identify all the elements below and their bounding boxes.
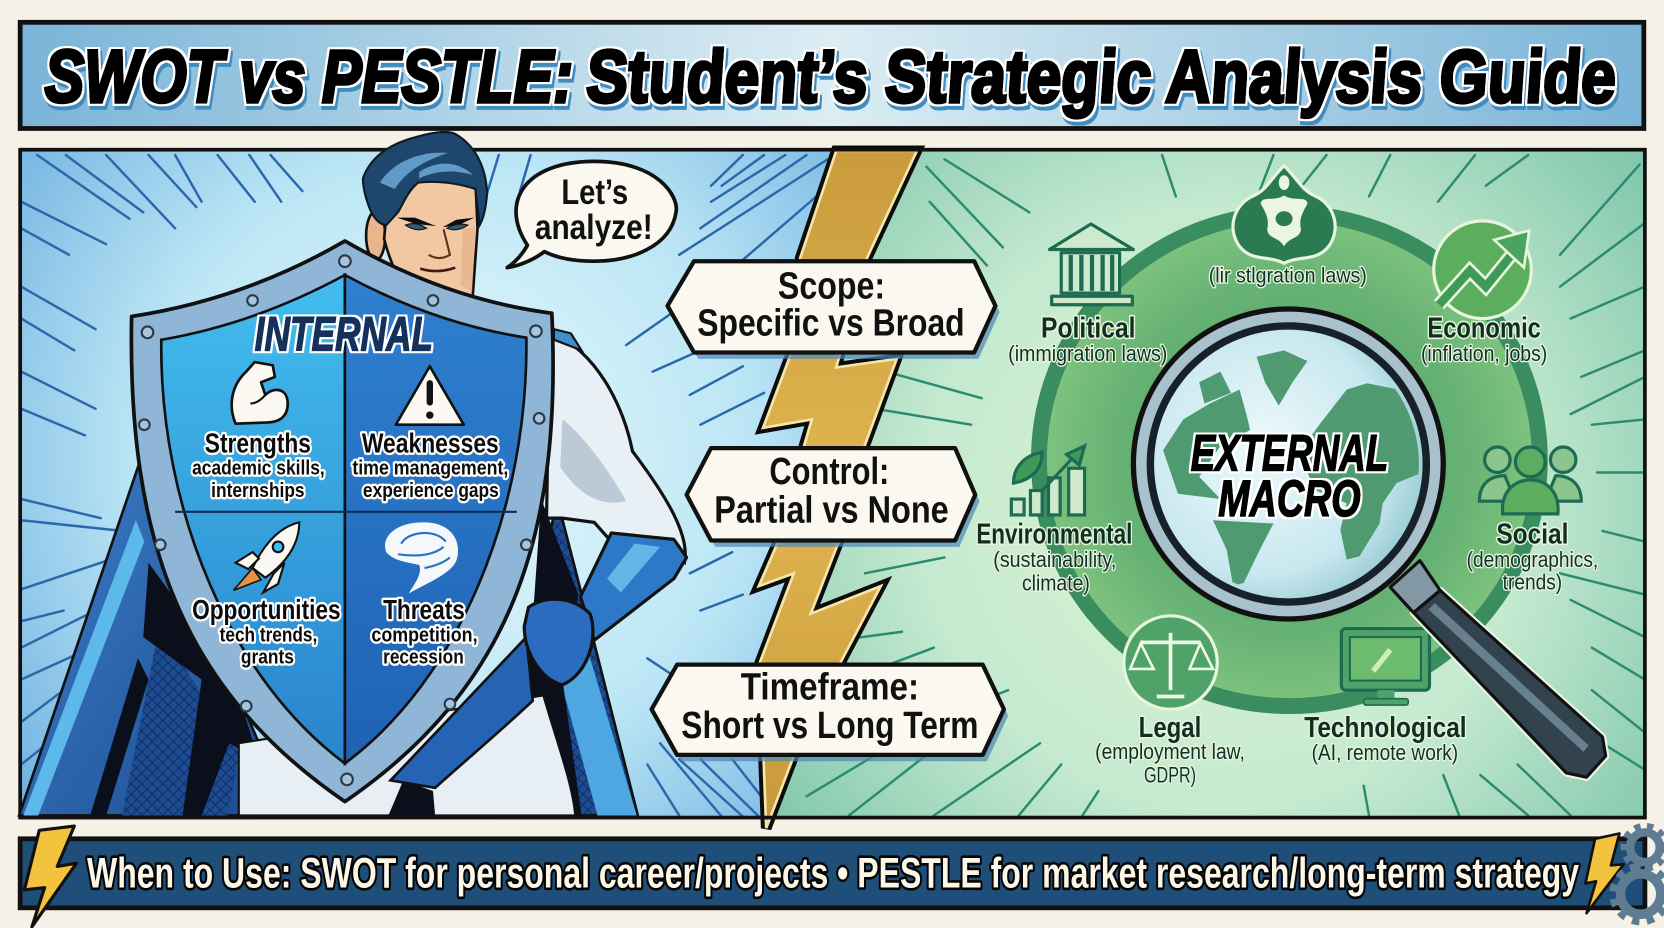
shield face right bbox=[345, 275, 526, 763]
gauntlet bbox=[580, 533, 687, 640]
pestle: environmental bbox=[976, 446, 1132, 595]
pestle: legal: GDPR) bbox=[1144, 763, 1196, 788]
quadrant: threats: Threats bbox=[383, 594, 465, 625]
superhero figure bbox=[19, 132, 687, 815]
pestle: social: Social bbox=[1496, 519, 1568, 551]
magnifying glass with globe bbox=[1133, 309, 1606, 777]
hair highlights bbox=[380, 153, 473, 189]
divider lightning bolt bbox=[759, 151, 917, 828]
pestle: social: trends) bbox=[1503, 569, 1562, 594]
quadrant: opportunities: Opportunities bbox=[192, 594, 341, 625]
brows bbox=[397, 218, 474, 227]
pestle: political bbox=[1008, 224, 1167, 366]
icon: scales of justice bbox=[1124, 616, 1217, 709]
comparison: control: Control: bbox=[769, 450, 889, 493]
icon: growth arrow bbox=[1434, 221, 1531, 319]
quadrant: opportunities: grants bbox=[241, 647, 294, 669]
comparison: timeframe bbox=[652, 665, 1008, 761]
quadrant: threats: competition, bbox=[371, 624, 478, 646]
icon: government building bbox=[1050, 224, 1133, 305]
gap between legs bbox=[388, 780, 435, 815]
quadrant dividers bbox=[175, 511, 517, 513]
icon: tornado bbox=[385, 522, 458, 594]
title: SWOT vs PESTLE: bbox=[45, 35, 573, 118]
quadrant: strengths: internships bbox=[211, 480, 305, 502]
cape right bbox=[499, 499, 638, 815]
pestle: economic: (inflation, jobs) bbox=[1421, 341, 1547, 366]
icon: gears bbox=[1613, 826, 1664, 922]
panel frame bbox=[20, 150, 1645, 818]
lens label: MACRO bbox=[1218, 470, 1360, 527]
shoulder and arm bbox=[547, 331, 685, 563]
speech bubble bbox=[507, 161, 676, 268]
quadrant: threats: recession bbox=[383, 647, 464, 669]
ring and disc behind PESTLE factors bbox=[1039, 213, 1540, 706]
icon: rocket bbox=[233, 522, 299, 592]
nose bbox=[429, 229, 450, 258]
hair bbox=[363, 132, 487, 225]
quadrant: weaknesses bbox=[352, 427, 508, 502]
quadrant: threats bbox=[371, 594, 478, 669]
icon: left lightning bbox=[24, 826, 76, 927]
comparison: timeframe: Timeframe: bbox=[741, 666, 919, 709]
title bbox=[45, 35, 1619, 118]
fist bbox=[524, 599, 593, 685]
shield face left bbox=[161, 275, 345, 763]
shield heading: INTERNAL bbox=[255, 308, 433, 361]
pestle: social: (demographics, bbox=[1467, 547, 1598, 572]
pestle: environmental: (sustainability, bbox=[993, 547, 1116, 572]
comparison: control: Partial vs None bbox=[714, 488, 949, 531]
lens rim bbox=[1133, 309, 1443, 619]
quadrant: weaknesses: time management, bbox=[352, 458, 508, 480]
title banner bbox=[20, 22, 1644, 128]
handle bbox=[1390, 561, 1606, 777]
bottom banner bbox=[20, 839, 1645, 908]
quadrant: weaknesses: experience gaps bbox=[363, 480, 499, 502]
pestle: political: (immigration laws) bbox=[1008, 341, 1167, 366]
pestle: legal: Legal bbox=[1139, 712, 1201, 744]
speech bubble: analyze! bbox=[535, 208, 653, 247]
globe continents bbox=[1163, 350, 1427, 586]
comparison: scope: Scope: bbox=[778, 264, 885, 307]
icon: right lightning bbox=[1585, 834, 1624, 913]
icon: leaf and bars bbox=[1011, 446, 1085, 515]
ear bbox=[366, 211, 385, 260]
cheek shading bbox=[461, 228, 475, 292]
icon: three people bbox=[1479, 447, 1581, 514]
mouth bbox=[420, 268, 455, 271]
pestle: environmental: Environmental bbox=[976, 519, 1132, 551]
quadrant: strengths: Strengths bbox=[205, 427, 311, 458]
speech bubble: Let’s bbox=[561, 173, 628, 212]
legs bbox=[239, 695, 575, 815]
quadrant: weaknesses: Weaknesses bbox=[362, 427, 499, 458]
quadrant: opportunities bbox=[192, 594, 341, 669]
pestle: economic: Economic bbox=[1427, 313, 1541, 345]
shoulder strap bbox=[554, 329, 582, 350]
panel: internal background bbox=[20, 150, 849, 818]
comparison: scope: Specific vs Broad bbox=[697, 302, 965, 345]
cape left bbox=[19, 467, 259, 815]
shield rim bbox=[131, 241, 553, 802]
pestle: technological: Technological bbox=[1304, 712, 1467, 744]
pestle: political: Political bbox=[1041, 313, 1136, 345]
lens label bbox=[1191, 424, 1388, 527]
eyes bbox=[405, 224, 468, 230]
pestle: legal: (employment law, bbox=[1095, 739, 1245, 764]
shield bbox=[131, 241, 553, 802]
panel: external background bbox=[775, 150, 1645, 818]
pestle: technological bbox=[1304, 629, 1467, 765]
lens label: EXTERNAL bbox=[1191, 424, 1388, 481]
pestle: social bbox=[1467, 447, 1598, 594]
head bbox=[363, 132, 487, 308]
comparison: timeframe: Short vs Long Term bbox=[681, 704, 978, 747]
pestle: legal bbox=[1095, 616, 1245, 788]
icon: monitor bbox=[1341, 629, 1429, 705]
icon: abstract emblem bbox=[1233, 166, 1335, 263]
pestle: technological: (AI, remote work) bbox=[1312, 740, 1458, 765]
pestle: economic bbox=[1421, 221, 1547, 366]
quadrant: strengths: academic skills, bbox=[192, 458, 325, 480]
pestle: top partial label: (lir stlgration laws) bbox=[1209, 264, 1367, 287]
icon: muscle arm bbox=[232, 362, 288, 424]
quadrant: strengths bbox=[192, 427, 325, 502]
comparison: control bbox=[687, 448, 980, 547]
comparison: scope bbox=[668, 261, 1000, 359]
quadrant: opportunities: tech trends, bbox=[220, 624, 317, 646]
pestle: top partial label bbox=[1209, 166, 1367, 287]
trunks bbox=[391, 637, 533, 788]
icon: warning triangle bbox=[396, 366, 464, 425]
pestle: environmental: climate) bbox=[1022, 570, 1090, 595]
face bbox=[384, 175, 478, 308]
